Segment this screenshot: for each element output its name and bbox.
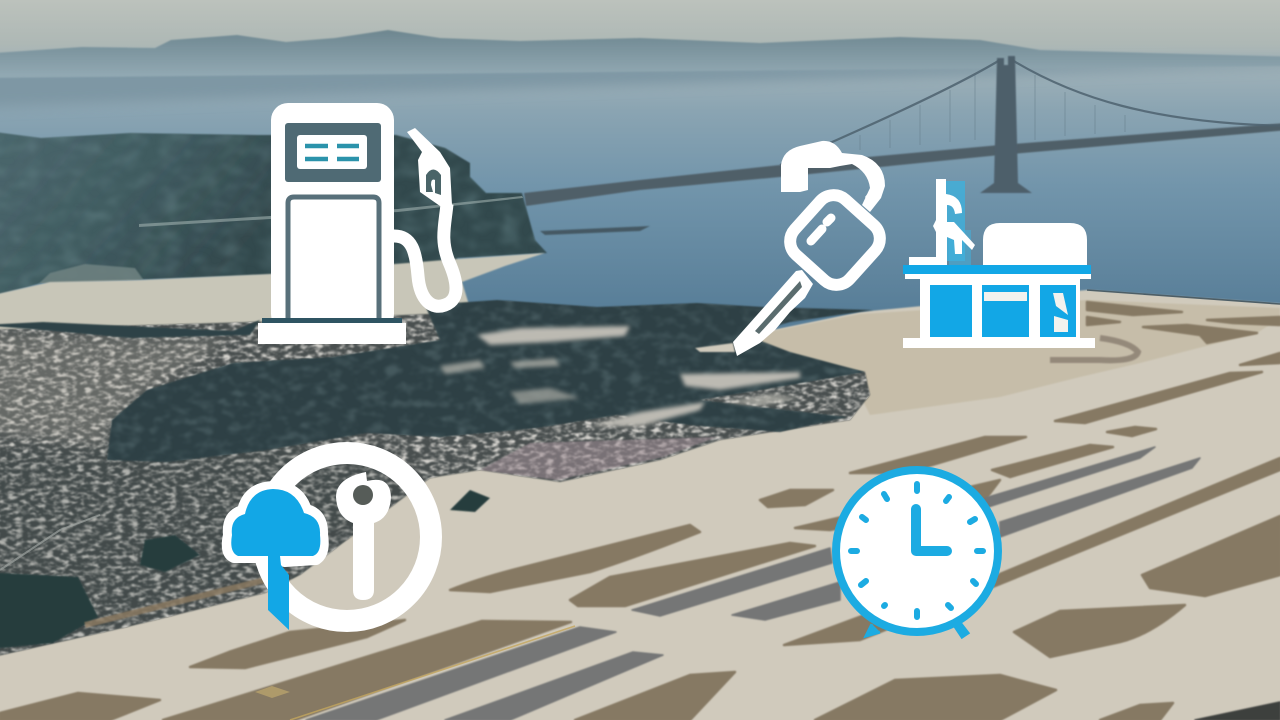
- clock ticks: [851, 484, 983, 617]
- pale sand shore: [0, 253, 545, 340]
- icon: tree and wrench ring: [228, 453, 431, 630]
- tap fixture: [909, 179, 975, 265]
- nozzle: [407, 128, 452, 206]
- icon: fuel pump: [258, 103, 456, 344]
- town road: [0, 515, 100, 570]
- town speckle: [0, 310, 880, 670]
- hose: [394, 204, 456, 306]
- key blade: [733, 270, 813, 356]
- wrench: [336, 472, 391, 600]
- lower mountain band: [0, 62, 1280, 108]
- screen dashes: [305, 146, 359, 159]
- clock feet: [866, 620, 968, 637]
- dark headland: [0, 130, 547, 300]
- lower left trees: [0, 490, 490, 650]
- icon: car key with nozzle: [733, 141, 887, 356]
- shoreline edge: [1087, 290, 1280, 304]
- tree cloud: [231, 489, 320, 630]
- sand spit: [695, 343, 735, 352]
- lower town shade: [0, 445, 430, 660]
- forest clearings: [440, 326, 800, 426]
- key fob: [783, 188, 887, 292]
- forest mottling: [114, 301, 858, 460]
- yellow taxi line: [290, 626, 575, 720]
- tree cloud outline: [228, 487, 323, 561]
- bridge tower: [980, 56, 1032, 193]
- pump body: [271, 103, 394, 331]
- bridge cables: [780, 60, 1280, 165]
- dark forest: [107, 300, 873, 462]
- bridge deck: [524, 122, 1280, 206]
- pump lower panel: [288, 197, 379, 322]
- pale shrub patch: [38, 264, 144, 284]
- nozzle top: [781, 141, 885, 212]
- canopy roof: [983, 223, 1087, 265]
- nozzle clip: [865, 187, 875, 202]
- pump screen: [285, 123, 381, 182]
- bridge: [524, 56, 1280, 235]
- upper town glow: [0, 333, 230, 445]
- clock face: [836, 470, 998, 632]
- runway brown strips: [0, 302, 1280, 720]
- small pier: [540, 226, 650, 235]
- fob dots: [811, 218, 831, 241]
- airfield ground: [0, 290, 1280, 720]
- clock hands: [916, 509, 947, 551]
- ring: [263, 453, 431, 621]
- blue fascia: [903, 265, 1091, 274]
- forest strip: [0, 320, 260, 338]
- pump base: [262, 318, 402, 323]
- tap blue backing: [945, 181, 965, 261]
- headland texture: [0, 134, 536, 286]
- distant mountains: [0, 30, 1280, 78]
- dirt zone: [700, 300, 1280, 415]
- brown fence edge: [85, 580, 265, 625]
- window details: [984, 292, 1027, 301]
- town base: [0, 312, 870, 660]
- icon: service station: [903, 179, 1095, 348]
- shop windows: [930, 285, 972, 337]
- icon: alarm clock: [836, 470, 998, 637]
- coastal road: [139, 196, 523, 227]
- runway grey strips: [306, 447, 1280, 720]
- dirt road curve: [1050, 338, 1138, 360]
- shop body: [903, 274, 1095, 348]
- yellow marking: [255, 686, 290, 698]
- pinkish car park: [480, 437, 717, 480]
